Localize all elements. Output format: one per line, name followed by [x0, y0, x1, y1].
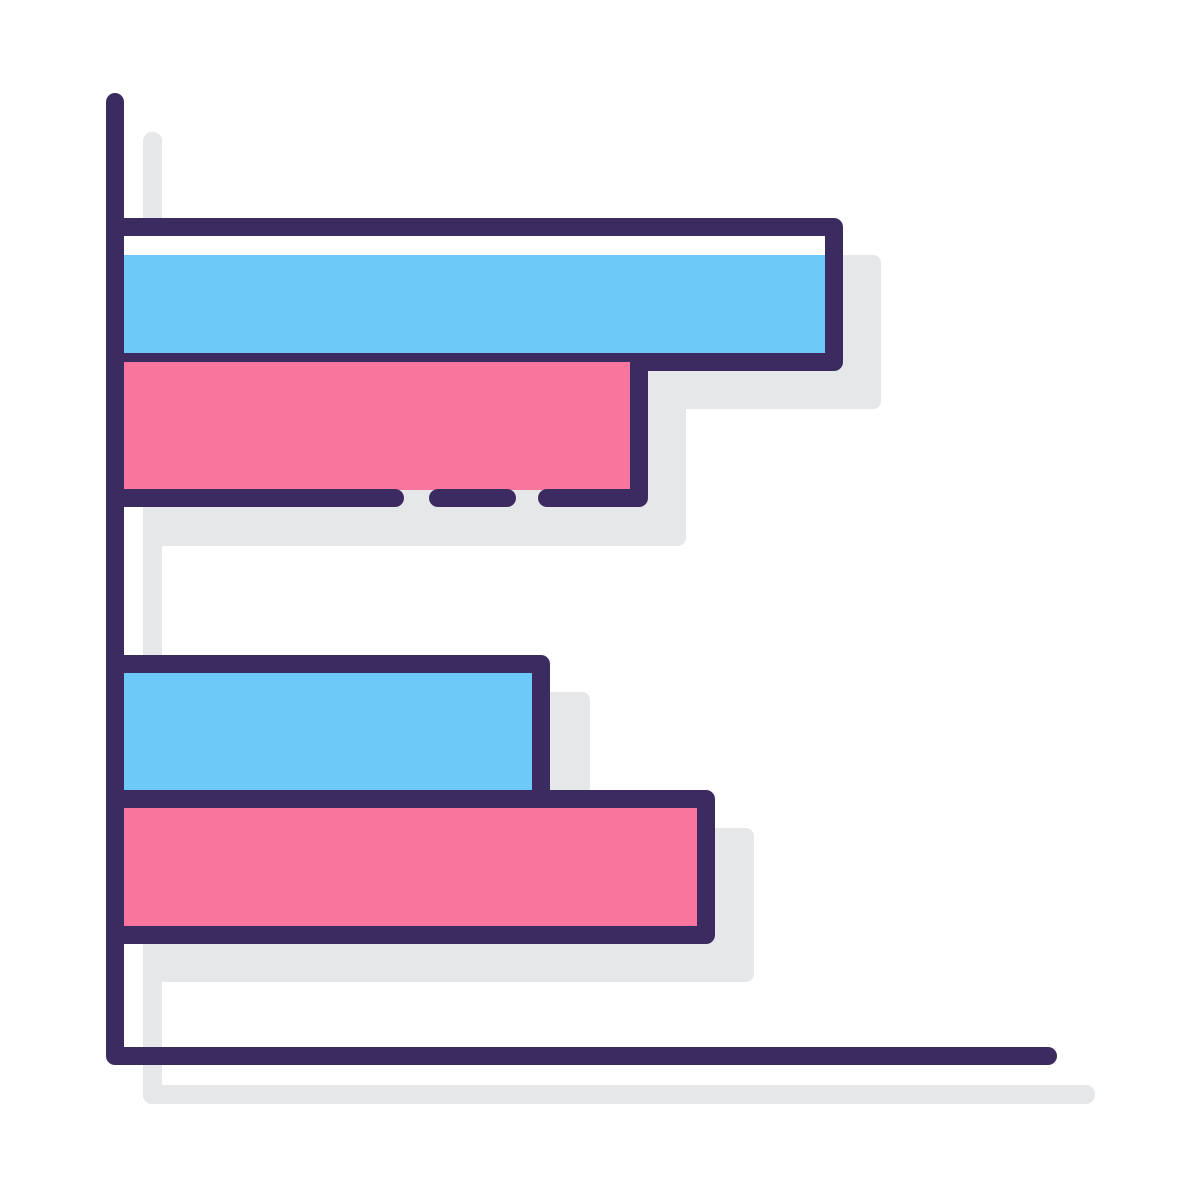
- bar 3 blue: [115, 664, 541, 799]
- shadow layer: [143, 132, 1095, 1104]
- axes: [115, 102, 1048, 1056]
- bar 1 blue: [115, 227, 834, 362]
- bar 2 pink: [115, 362, 639, 498]
- bar 4 pink: [115, 799, 706, 935]
